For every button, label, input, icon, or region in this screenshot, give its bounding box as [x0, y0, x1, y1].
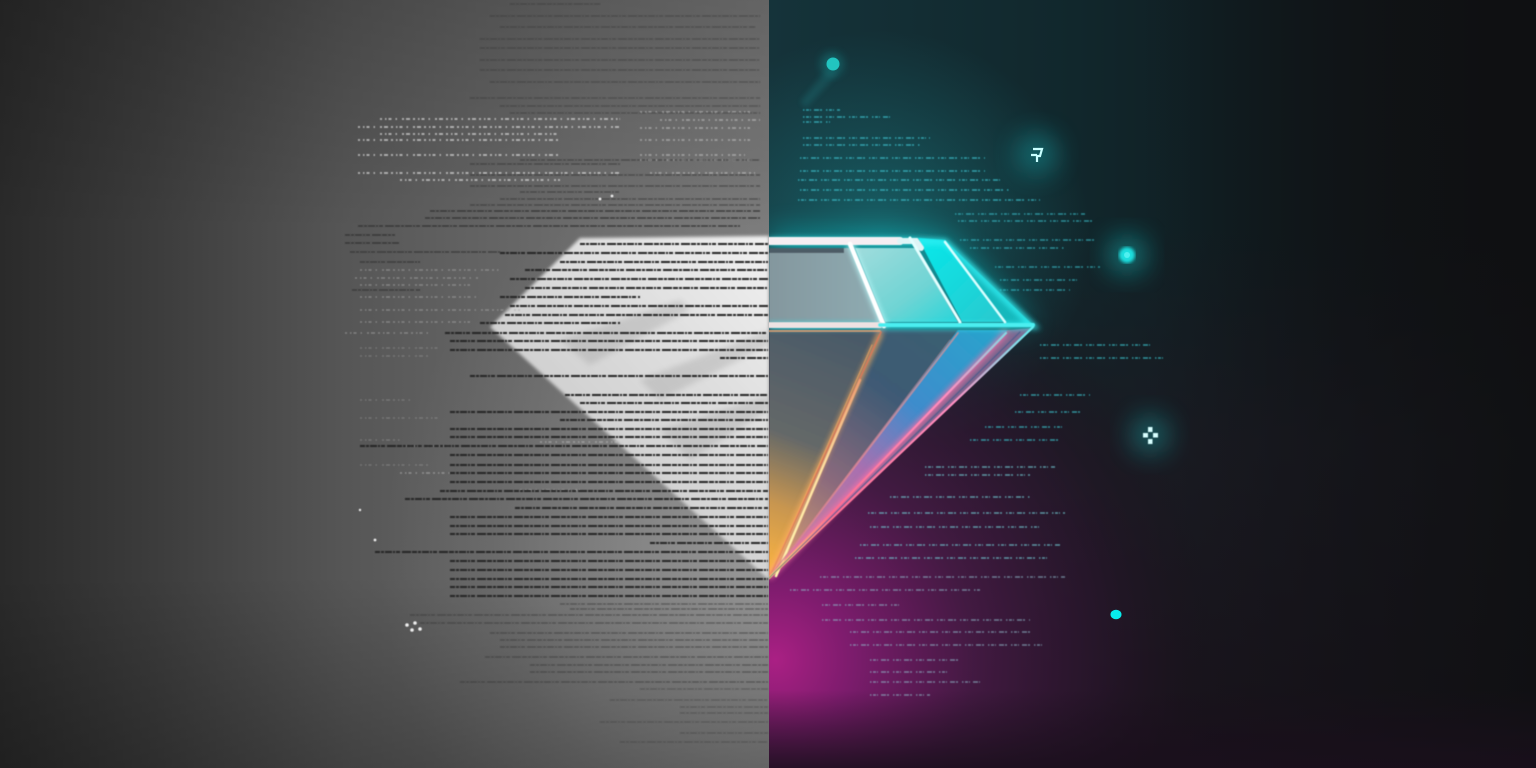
faint text rows lower document	[410, 604, 768, 742]
glowing prism	[769, 232, 1036, 578]
dark text rows upper document	[345, 4, 760, 290]
prism light edges	[769, 238, 1033, 578]
dark text rows on paper	[360, 244, 768, 596]
panel: monochrome document side	[0, 0, 769, 768]
icon: small white dots	[359, 195, 613, 632]
icon: glowing orb	[1110, 238, 1144, 272]
icon: small cyan dot	[1110, 610, 1122, 619]
prism lower facets	[769, 328, 1033, 578]
small floating dot with trail	[800, 53, 843, 108]
paper fold streaks	[560, 300, 769, 460]
light text rows upper document	[345, 112, 760, 490]
teal text rows	[790, 110, 1165, 695]
prism glow strokes	[769, 241, 1033, 578]
prism upper facets	[769, 238, 1033, 325]
icon: glowing pin	[1017, 134, 1057, 174]
icon: glowing cross sparkle	[1132, 417, 1168, 453]
panel: glowing neon side	[769, 0, 1536, 768]
